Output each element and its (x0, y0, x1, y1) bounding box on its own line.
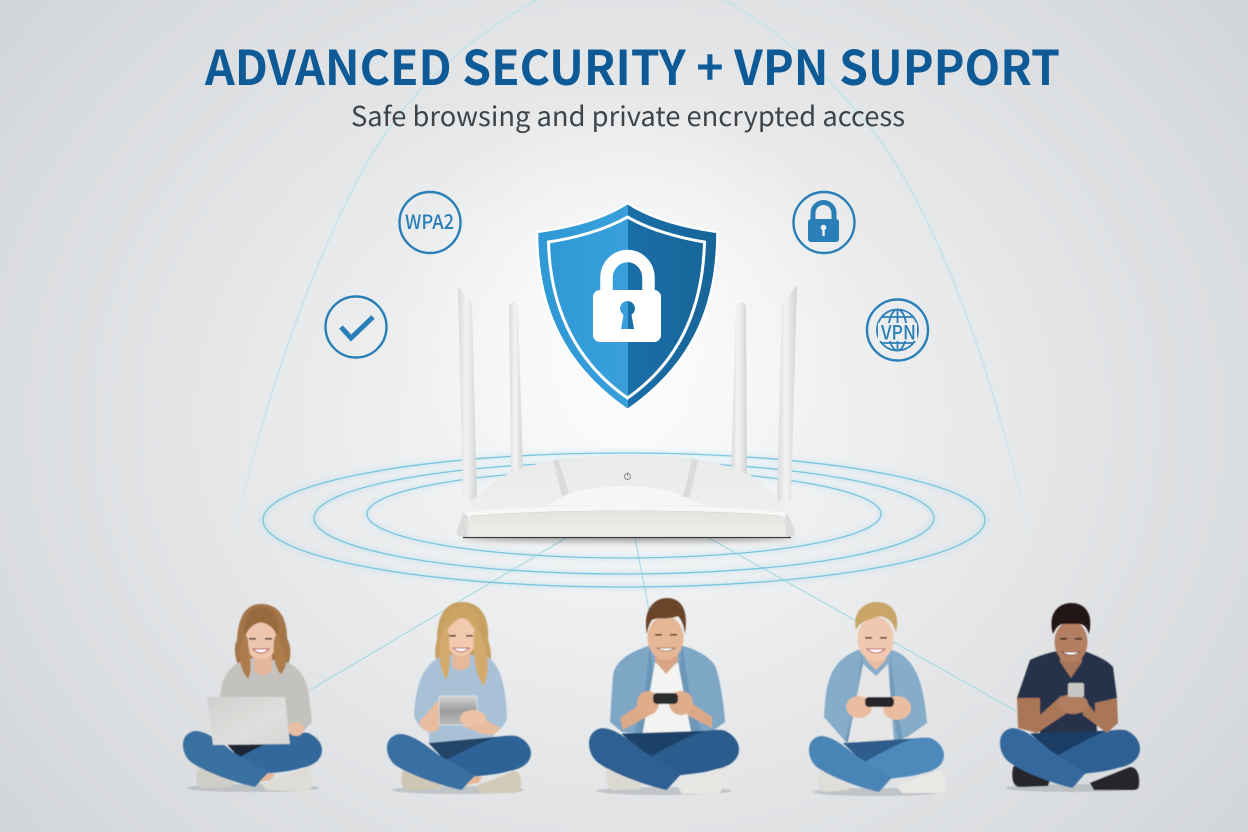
t-shirt (642, 662, 692, 737)
icon: WPA2 badge: WPA2 (405, 206, 454, 235)
hair back (235, 604, 290, 679)
t-shirt (1017, 651, 1117, 735)
person: man with game controller (589, 598, 739, 795)
padlock shackle (606, 256, 648, 294)
hair (646, 598, 686, 634)
shield with padlock (537, 203, 718, 410)
router shadow (463, 534, 793, 542)
central glow (395, 90, 855, 530)
laptop (207, 697, 290, 745)
router centre hump (545, 486, 705, 505)
person: woman with laptop (183, 604, 322, 792)
face (245, 622, 277, 660)
subtitle: Safe browsing and private encrypted access (351, 95, 905, 134)
hands (846, 696, 872, 718)
sneakers (606, 766, 642, 790)
neck (452, 650, 470, 670)
jeans (809, 736, 944, 792)
person: blonde woman with game controller (809, 602, 945, 796)
router power icon (624, 472, 630, 480)
hair back (435, 602, 491, 687)
icon: VPN globe badge (867, 300, 928, 360)
sweater (414, 655, 507, 745)
Wi-Fi signal rings (263, 453, 985, 587)
hair (1051, 603, 1090, 634)
icon: padlock badge (794, 192, 854, 253)
person: woman with tablet (387, 602, 531, 794)
jeans (1000, 728, 1140, 788)
neck and face (655, 650, 678, 674)
sneakers (196, 767, 234, 788)
hair locks (240, 632, 286, 679)
icon: VPN globe badge: VPN (880, 316, 916, 346)
jeans (589, 728, 739, 790)
face (445, 618, 477, 656)
hair (855, 602, 897, 632)
shoes (1012, 763, 1050, 787)
icon: check mark badge (326, 296, 386, 358)
smartphone (1068, 683, 1084, 697)
sweater (220, 658, 312, 745)
router rim (457, 506, 795, 537)
router top shell (457, 455, 795, 537)
router (457, 285, 797, 542)
antenna: inner left (509, 302, 523, 472)
t-shirt (848, 664, 894, 742)
hand (288, 722, 304, 736)
padlock keyhole (620, 301, 635, 329)
shield inner outline (548, 217, 704, 398)
hands (1058, 694, 1088, 714)
antenna: outer right (777, 285, 797, 501)
jeans (387, 734, 531, 790)
title: ADVANCED SECURITY + VPN SUPPORT (204, 29, 1060, 99)
sneakers (401, 768, 442, 790)
antenna: outer left (458, 287, 477, 501)
arms (1017, 693, 1118, 733)
padlock body (593, 290, 661, 342)
person: man with smartphone (1000, 603, 1140, 792)
jacket (610, 645, 725, 735)
router ridges (553, 459, 698, 497)
hands (637, 691, 659, 715)
neck and face (1060, 650, 1082, 678)
jacket (824, 650, 927, 742)
neck (254, 655, 272, 675)
shield body (537, 203, 718, 410)
tablet (439, 696, 477, 725)
sneakers (817, 768, 850, 792)
game controller (653, 693, 678, 704)
router side wedges (457, 513, 795, 537)
antenna: inner right (731, 302, 747, 474)
router front face (468, 511, 787, 535)
hand on tablet (460, 710, 486, 726)
jeans (183, 731, 322, 787)
forearms (419, 697, 500, 735)
icon: WPA2 badge (400, 192, 460, 253)
neck and face (866, 650, 886, 670)
connection lines to devices (310, 538, 1016, 711)
signal dome arc (232, 0, 1032, 545)
game controller (865, 697, 894, 707)
hair locks (439, 625, 488, 686)
forearms (620, 702, 712, 730)
